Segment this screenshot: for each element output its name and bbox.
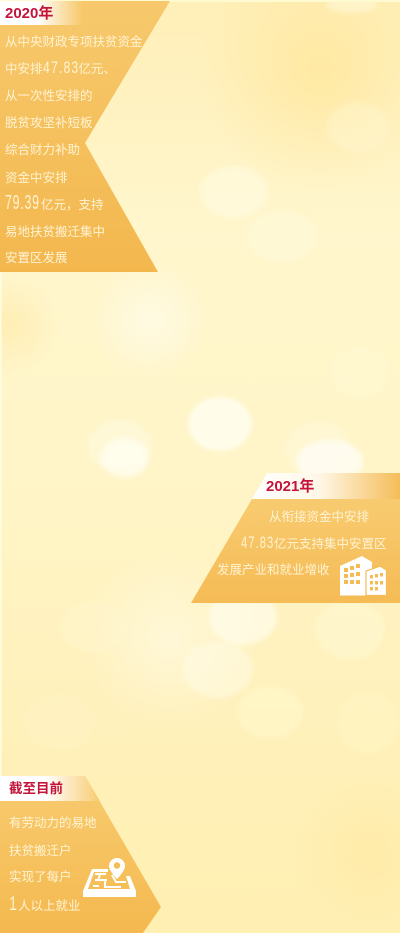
text: 2021 body: 亿元支持集中安置区	[274, 537, 387, 551]
text: 2020 body: 综合财力补助	[5, 143, 80, 157]
heading: 2021年: 2021年	[266, 478, 314, 495]
text: current body: 人以上就业	[18, 899, 81, 913]
text: 2020 body: 安置区发展	[5, 251, 68, 265]
text: 2021 body	[217, 510, 387, 577]
text: 2020 body: 易地扶贫搬迁集中	[5, 225, 105, 239]
panel: 2021	[191, 473, 400, 603]
text: 2021 body: 发展产业和就业增收	[217, 563, 330, 577]
text: 2020 body: 中安排 亿元、	[5, 62, 116, 76]
text: 2020 body: 脱贫攻坚补短板	[5, 116, 93, 130]
text: current body: 1	[9, 894, 18, 915]
panel: 2020	[0, 1, 170, 272]
heading: 2020年: 2020年	[5, 5, 53, 22]
text: current body: 扶贫搬迁户	[9, 844, 72, 858]
panel shape: current	[0, 776, 161, 933]
text: 2020 body	[5, 35, 143, 265]
text: 2020 body: 79.39	[5, 192, 40, 214]
text: 2020 body: 亿元，支持	[41, 198, 104, 212]
icon: map pin	[83, 858, 136, 897]
text: 2020 body: 从一次性安排的	[5, 89, 93, 103]
text: 2020 body: 47.83	[43, 58, 79, 77]
panel: 截至目前	[0, 776, 161, 933]
text: current body: 实现了每户	[9, 870, 72, 884]
text: current body	[9, 816, 97, 915]
text: 2020 body: 资金中安排	[5, 171, 68, 185]
text: 2021 body: 从衔接资金中安排	[269, 510, 369, 524]
icon: buildings	[340, 556, 387, 596]
heading: 截至目前: 截至目前	[9, 781, 63, 796]
text: 2021 body: 47.83	[241, 533, 274, 552]
text: current body: 有劳动力的易地	[9, 816, 97, 830]
panel shape: 2021	[191, 473, 400, 603]
text: 2020 body: 从中央财政专项扶贫资金	[5, 35, 143, 49]
panel shape: 2020	[0, 1, 170, 272]
